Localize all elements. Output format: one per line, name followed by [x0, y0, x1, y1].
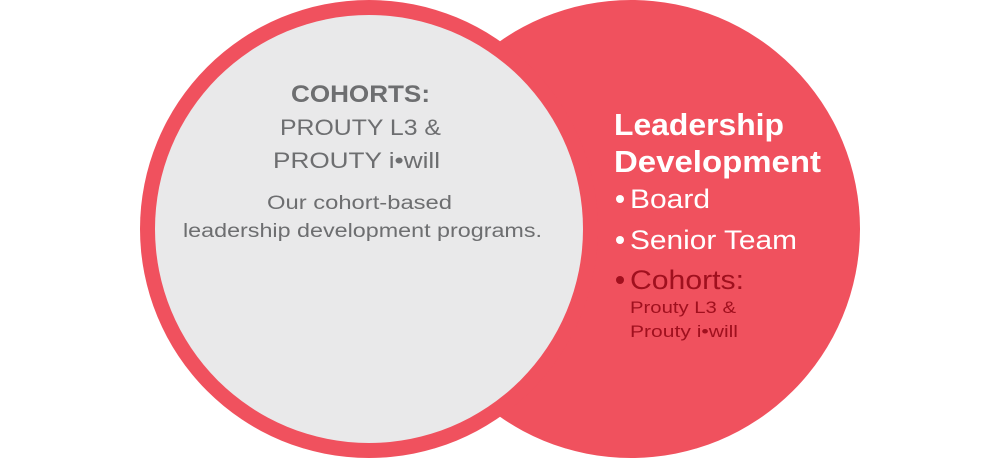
list item: cohorts: Cohorts: — [630, 265, 744, 295]
text block: cohorts: COHORTS: — [291, 81, 430, 108]
text block: cohorts: PROUTY L3 & — [280, 115, 441, 140]
list item: cohorts: Prouty L3 & — [630, 298, 737, 317]
text block: cohorts: PROUTY i•will — [273, 148, 440, 173]
list: board, senior team: Senior Team — [630, 225, 797, 255]
circle: leadership development (right) — [402, 0, 860, 458]
list: board, senior team — [616, 184, 797, 255]
text block: cohorts: leadership development programs. — [183, 221, 542, 242]
circle: cohorts (left) — [140, 0, 598, 458]
text block: cohorts: Our cohort-based — [267, 193, 452, 214]
list: board, senior team: Board — [630, 184, 710, 214]
list item: cohorts — [616, 265, 744, 341]
text block: cohorts — [183, 81, 542, 242]
heading: leadership development — [614, 107, 821, 179]
list item: cohorts: Prouty i•will — [630, 322, 738, 341]
heading: leadership development: Development — [614, 144, 821, 179]
heading: leadership development: Leadership — [614, 107, 784, 142]
